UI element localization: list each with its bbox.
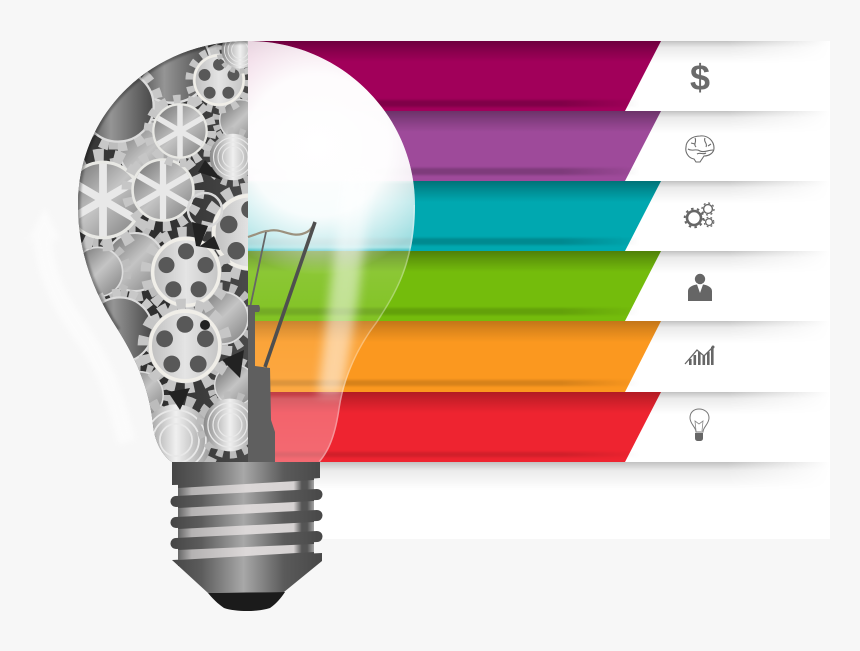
thin ring [188, 193, 222, 227]
coloured bands [248, 41, 661, 462]
bulb: gear half [78, 41, 248, 462]
dark gaps between gears [168, 160, 244, 410]
base lower taper [172, 553, 322, 593]
infographic canvas [78, 41, 802, 611]
band 4: green [248, 251, 661, 321]
icon: businessman [688, 274, 712, 301]
band 5: orange [248, 321, 661, 392]
icon: small light bulb [690, 409, 709, 441]
icon: brain [686, 136, 714, 162]
faint ghost arrow [28, 208, 135, 444]
hole gears [138, 50, 248, 394]
bulb edge shading [78, 41, 248, 330]
light thread stripes [178, 480, 314, 560]
band 2: purple [248, 111, 661, 181]
band 6: red [248, 392, 661, 462]
dark thread ridges [176, 494, 317, 544]
icon: growth chart [685, 346, 714, 365]
icon: gears [685, 203, 714, 227]
base collar [172, 462, 320, 485]
soft dark streaks inside the bands [248, 100, 640, 457]
filament [248, 222, 315, 462]
dark disc gears [92, 44, 220, 367]
screw base [172, 462, 322, 611]
band 3: teal [248, 181, 661, 251]
bulb: glass half [248, 41, 415, 462]
black base cap [208, 592, 285, 611]
base body [178, 478, 314, 566]
tab shadows on the white area [300, 41, 830, 490]
icon: dollar sign: $ [690, 57, 710, 98]
concentric gears [150, 41, 248, 462]
band 1: magenta [248, 41, 661, 111]
filler gears [82, 93, 248, 419]
spoke gears [59, 100, 211, 244]
white panel behind the bands [248, 41, 830, 539]
